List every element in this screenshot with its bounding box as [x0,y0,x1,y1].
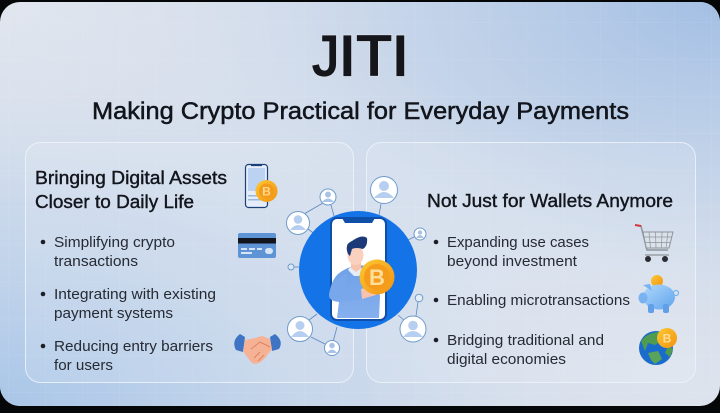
bitcoin coin: B [369,265,385,290]
panel heading: right: Not Just for Wallets Anymore [427,190,673,211]
bullet: bridging economies: Bridging traditional and [447,332,604,349]
bullet: simplifying crypto transactions: Simplifying crypto [54,234,175,251]
person [329,237,380,318]
bullet: expanding use cases: beyond investment [447,253,578,270]
network node: bottom left large [288,316,312,342]
icon: handshake [234,334,281,364]
bullet: expanding use cases [434,234,589,270]
network node: top right large [370,176,398,204]
subtitle: Making Crypto Practical for Everyday Payments [92,98,629,125]
bullet: bridging economies [434,332,604,368]
icon: globe with bitcoin: B [663,332,672,346]
icon: shopping cart [635,225,673,262]
title: JITI: J [311,22,340,90]
network connectors [294,203,418,345]
phone [331,218,386,320]
bullet: reducing entry barriers [41,338,213,374]
bullet: integrating with payment systems: payment systems [54,305,173,322]
icon: globe with bitcoin [639,328,677,365]
title: JITI: ITI [339,22,409,90]
bullet: integrating with payment systems [41,286,216,322]
bullet: simplifying crypto transactions: transactions [54,253,138,270]
bullet: simplifying crypto transactions [41,234,175,270]
network node: top left large [286,212,310,234]
bullet: integrating with payment systems: Integrating with existing [54,286,216,303]
network node: left tiny [288,264,294,270]
bullet: bridging economies: digital economies [447,351,566,368]
network node: bottom right large [400,316,426,342]
bullet: expanding use cases: Expanding use cases [447,234,589,251]
panel heading: left: Bringing Digital Assets [35,167,227,188]
network node: bottom small [324,340,340,356]
icon: phone with bitcoin: B [262,184,271,198]
icon: piggy bank [638,275,678,313]
center illustration: person in phone with bitcoin [299,211,417,329]
panel heading: left: Closer to Daily Life [35,191,194,212]
network node: right small [414,228,426,240]
icon: phone with bitcoin [246,164,278,208]
icon: credit card [238,233,276,258]
bullet: reducing entry barriers: for users [54,357,113,374]
bullet: enabling microtransactions: Enabling microtransactions [447,292,630,309]
panel heading: left [35,167,227,212]
bullet: reducing entry barriers: Reducing entry barriers [54,338,213,355]
panel: Bringing Digital Assets [26,142,354,382]
network node: bottom right tiny [415,294,423,302]
blue circle [299,211,417,329]
panel: Not Just for Wallets Anymore [366,142,696,382]
network node: top left small [320,189,336,205]
